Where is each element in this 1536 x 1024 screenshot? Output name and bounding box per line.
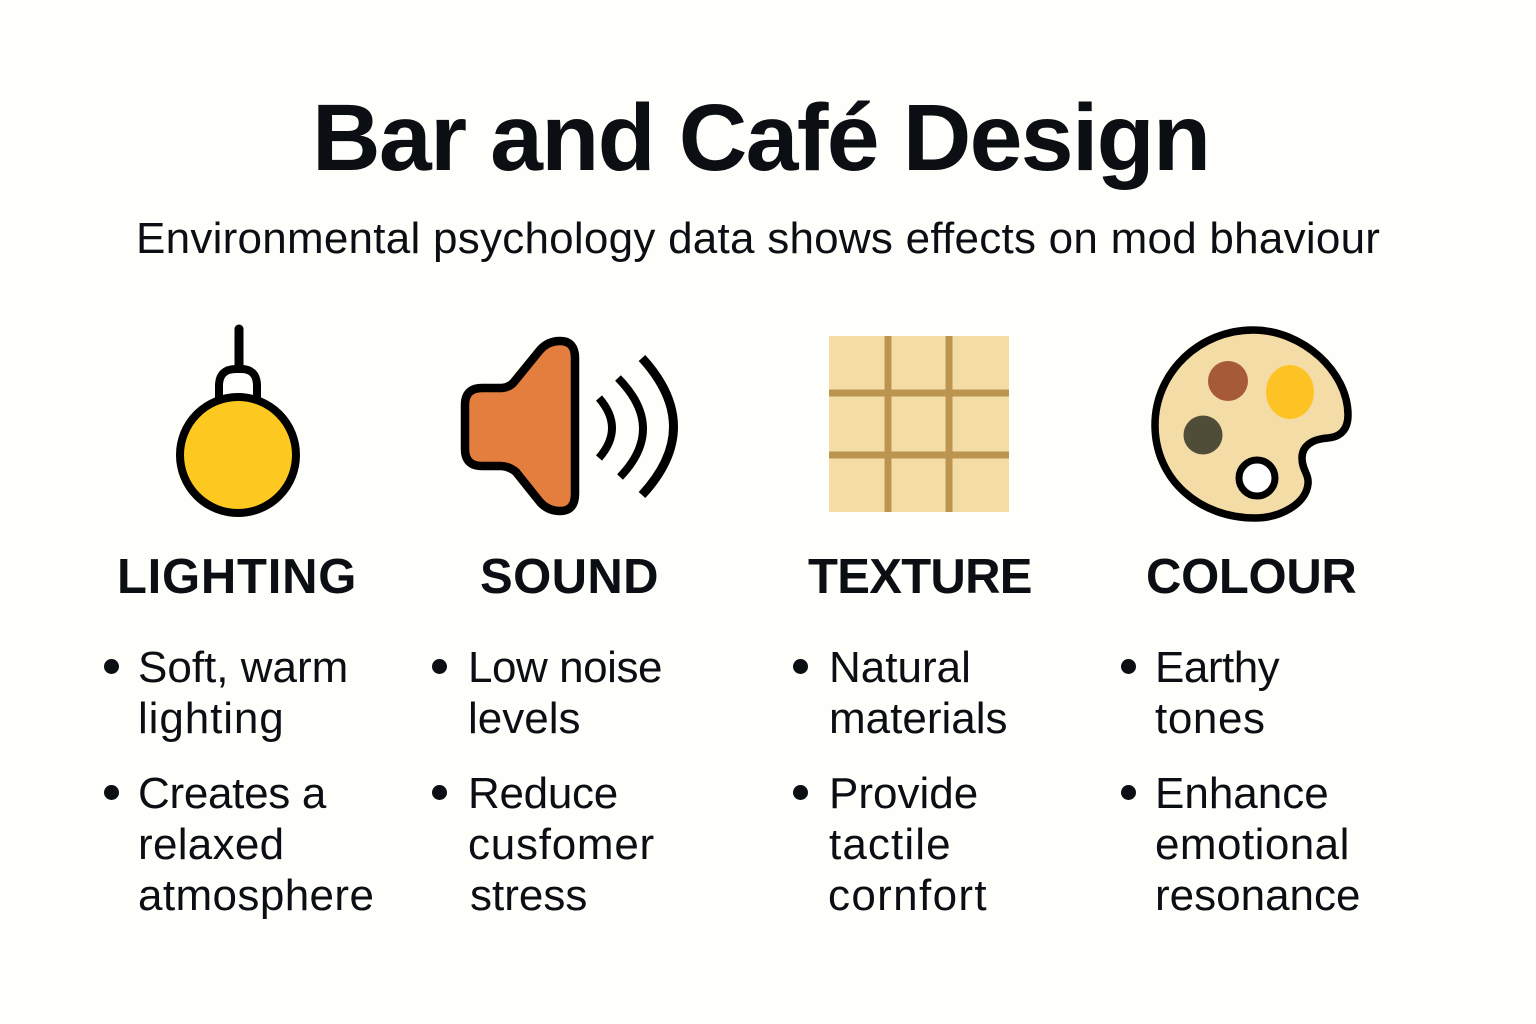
list: lighting: Creates a bbox=[138, 769, 326, 818]
list: lighting bbox=[104, 643, 374, 920]
list: texture: Provide bbox=[829, 769, 978, 818]
list: sound: Low noise bbox=[468, 643, 662, 692]
list: texture: tactile bbox=[829, 820, 952, 869]
list: texture: materials bbox=[829, 694, 1008, 743]
heading: sound: SOUND bbox=[480, 550, 659, 604]
icon: pendant lamp bbox=[176, 324, 300, 517]
list: lighting: lighting bbox=[138, 694, 285, 743]
list: sound bbox=[432, 643, 662, 920]
list: lighting: relaxed bbox=[138, 820, 284, 869]
list: texture: cornfort bbox=[828, 871, 988, 920]
icon: speaker bbox=[460, 336, 678, 516]
heading: lighting: LIGHTING bbox=[117, 550, 357, 604]
list: colour: Enhance bbox=[1155, 769, 1329, 818]
list: lighting: Soft, warm bbox=[138, 643, 348, 692]
list: sound: stress bbox=[470, 871, 587, 920]
heading: texture: TEXTURE bbox=[808, 550, 1032, 604]
list: sound: cusfomer bbox=[468, 820, 655, 869]
list: sound: Reduce bbox=[468, 769, 618, 818]
title: Bar and Café Design bbox=[312, 85, 1209, 191]
list: colour: resonance bbox=[1155, 871, 1360, 920]
list: colour bbox=[1121, 643, 1360, 920]
list: texture: Natural bbox=[829, 643, 971, 692]
list: colour: emotional bbox=[1155, 820, 1350, 869]
list: colour: Earthy bbox=[1155, 643, 1279, 692]
icon: palette bbox=[1151, 326, 1352, 522]
subtitle: Environmental psychology data shows effects on mod bhaviour bbox=[136, 214, 1380, 263]
heading: colour: COLOUR bbox=[1146, 550, 1357, 604]
list: sound: levels bbox=[468, 694, 580, 743]
list: texture bbox=[793, 643, 1008, 920]
list: lighting: atmosphere bbox=[138, 871, 374, 920]
icon: texture grid bbox=[829, 336, 1009, 512]
list: colour: tones bbox=[1155, 694, 1266, 743]
